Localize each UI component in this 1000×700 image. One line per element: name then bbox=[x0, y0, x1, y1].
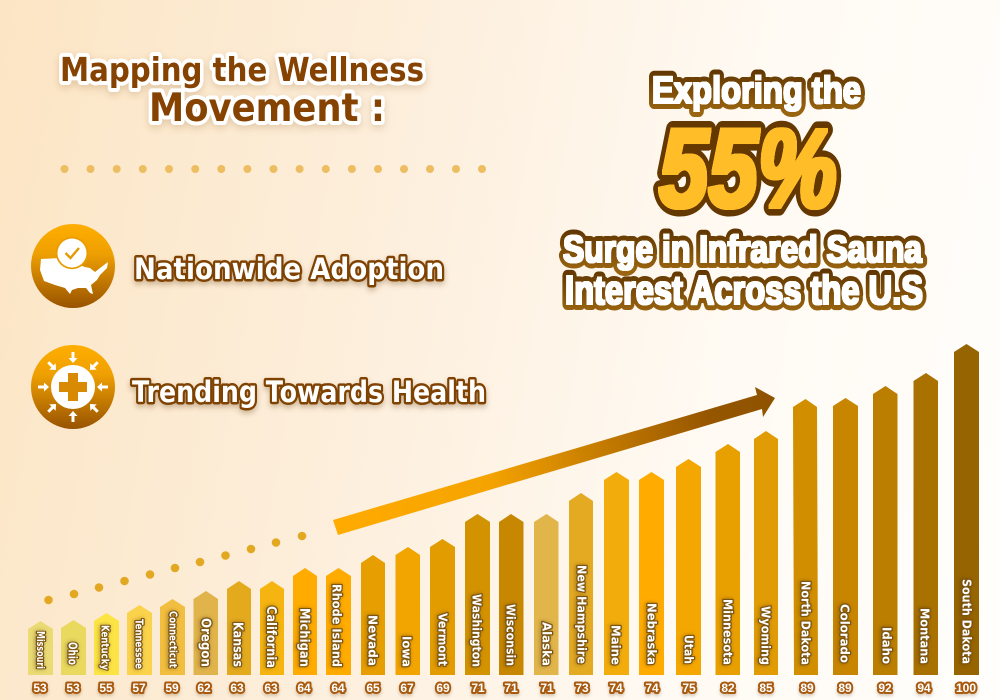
bar: North Dakota 89: 89 bbox=[800, 681, 814, 695]
bar: Utah 75 bbox=[676, 459, 701, 695]
bar: Colorado 89: Colorado bbox=[838, 604, 852, 663]
bar: South Dakota 100: South Dakota bbox=[960, 579, 974, 664]
left heading: Movement : bbox=[149, 86, 385, 131]
trend dots bbox=[44, 532, 306, 604]
bar: Montana 94: Montana bbox=[918, 608, 932, 664]
bar: Wyoming 85: 85 bbox=[759, 681, 773, 695]
big number: 55%: 55% bbox=[659, 106, 837, 231]
bar: Montana 94: 94 bbox=[917, 681, 931, 695]
bar: Rhode Island 64: Rhode Island bbox=[330, 584, 344, 667]
bar: Washington 71: Washington bbox=[470, 594, 484, 667]
bar: Wisconsin 71: 71 bbox=[504, 681, 518, 695]
title line: Surge in Infrared Sauna: Surge in Infrared Sauna bbox=[563, 229, 923, 271]
bar: Iowa 67: 67 bbox=[400, 681, 414, 695]
bar: Vermont 69: Vermont bbox=[436, 613, 450, 666]
bar: Nevada 65 bbox=[361, 555, 385, 695]
bar: Idaho 92: 92 bbox=[878, 681, 892, 695]
bar: Kentucky 55: Kentucky bbox=[98, 625, 112, 670]
bar: Nevada 65: Nevada bbox=[366, 615, 380, 666]
bar: Wyoming 85 bbox=[754, 431, 778, 695]
bar: Rhode Island 64: 64 bbox=[331, 681, 345, 695]
bar: Washington 71: 71 bbox=[471, 681, 485, 695]
label: Trending Towards Health: Trending Towards Health bbox=[132, 375, 486, 409]
icon: US map with check mark bbox=[31, 224, 115, 308]
bar: Michigan 64: Michigan bbox=[296, 608, 311, 667]
bar: New Hampshire 73: New Hampshire bbox=[574, 565, 588, 664]
bar: Ohio 53: Ohio bbox=[66, 642, 80, 665]
bar: Michigan 64: 64 bbox=[297, 681, 311, 695]
bar: Nebraska 74: Nebraska bbox=[644, 603, 658, 665]
title line: Exploring the: Exploring the bbox=[652, 70, 861, 112]
dotted divider bbox=[60, 165, 486, 173]
bar: Minnesota 82: Minnesota bbox=[720, 599, 734, 665]
bar: South Dakota 100: 100 bbox=[956, 681, 976, 695]
bar: Kansas 63 bbox=[227, 581, 251, 695]
bar: California 63: 63 bbox=[264, 681, 278, 695]
bar: Connecticut 59: Connecticut bbox=[166, 611, 178, 668]
bar: Colorado 89 bbox=[833, 398, 858, 695]
bar: Tennessee 57: 57 bbox=[132, 681, 146, 695]
bar: Oregon 62 bbox=[194, 591, 218, 695]
bar: Iowa 67 bbox=[396, 547, 420, 695]
icon: health cross with inward arrows bbox=[31, 345, 115, 429]
bar: Ohio 53 bbox=[61, 620, 86, 695]
bar: Washington 71 bbox=[465, 514, 490, 695]
bar: Connecticut 59: 59 bbox=[165, 681, 179, 695]
bar: Maine 74: Maine bbox=[608, 625, 622, 665]
bar: North Dakota 89: North Dakota bbox=[798, 581, 812, 665]
bar: Kansas 63: Kansas bbox=[230, 622, 244, 667]
bar: Missouri 53 bbox=[28, 621, 53, 695]
bar: Utah 75: 75 bbox=[682, 681, 696, 695]
bar: Tennessee 57: Tennessee bbox=[132, 619, 144, 669]
left heading: Mapping the Wellness bbox=[60, 50, 424, 89]
bar: Oregon 62: Oregon bbox=[198, 618, 212, 667]
bar: Ohio 53: 53 bbox=[66, 681, 80, 695]
bar: Alaska 71: Alaska bbox=[540, 622, 554, 666]
bar: Kansas 63: 63 bbox=[230, 681, 244, 695]
label: Nationwide Adoption: Nationwide Adoption bbox=[134, 252, 444, 286]
bar: California 63 bbox=[260, 581, 284, 695]
bar chart bbox=[28, 344, 979, 695]
bar: Colorado 89: 89 bbox=[838, 681, 852, 695]
bar: Tennessee 57 bbox=[127, 605, 152, 695]
bar: Wyoming 85: Wyoming bbox=[758, 606, 772, 665]
bar: New Hampshire 73 bbox=[569, 493, 593, 695]
bar: Missouri 53: Missouri bbox=[34, 631, 46, 669]
bar: Minnesota 82: 82 bbox=[721, 681, 735, 695]
bar: Vermont 69 bbox=[430, 539, 455, 695]
bar: Idaho 92: Idaho bbox=[880, 627, 894, 664]
bar: Nebraska 74 bbox=[639, 472, 664, 695]
bar: South Dakota 100 bbox=[954, 344, 979, 695]
bar: Nebraska 74: 74 bbox=[645, 681, 659, 695]
bar: North Dakota 89 bbox=[793, 399, 818, 695]
left heading bbox=[60, 50, 424, 131]
bar: Oregon 62: 62 bbox=[197, 681, 211, 695]
bar: Rhode Island 64 bbox=[326, 568, 351, 695]
bar: Missouri 53: 53 bbox=[33, 681, 47, 695]
bar: Nevada 65: 65 bbox=[366, 681, 380, 695]
bar: Idaho 92 bbox=[873, 386, 898, 695]
bar: Michigan 64 bbox=[293, 568, 317, 695]
bar: Wisconsin 71 bbox=[499, 514, 524, 695]
bar: New Hampshire 73: 73 bbox=[575, 681, 589, 695]
bar: Minnesota 82 bbox=[716, 444, 740, 695]
bar: Utah 75: Utah bbox=[682, 635, 696, 664]
bar: Connecticut 59 bbox=[160, 599, 185, 695]
bar: Maine 74: 74 bbox=[609, 681, 623, 695]
bar: Maine 74 bbox=[604, 472, 629, 695]
bar: Alaska 71 bbox=[534, 514, 558, 695]
bar: California 63: California bbox=[263, 606, 278, 668]
trend arrow bbox=[333, 387, 775, 535]
bar: Iowa 67: Iowa bbox=[400, 636, 414, 667]
bar: Kentucky 55 bbox=[94, 613, 119, 695]
right title bbox=[563, 70, 923, 313]
bar: Alaska 71: 71 bbox=[540, 681, 554, 695]
bar: Montana 94 bbox=[914, 373, 938, 695]
bar: Kentucky 55: 55 bbox=[99, 681, 113, 695]
bar: Wisconsin 71: Wisconsin bbox=[504, 604, 518, 666]
bar: Vermont 69: 69 bbox=[436, 681, 450, 695]
